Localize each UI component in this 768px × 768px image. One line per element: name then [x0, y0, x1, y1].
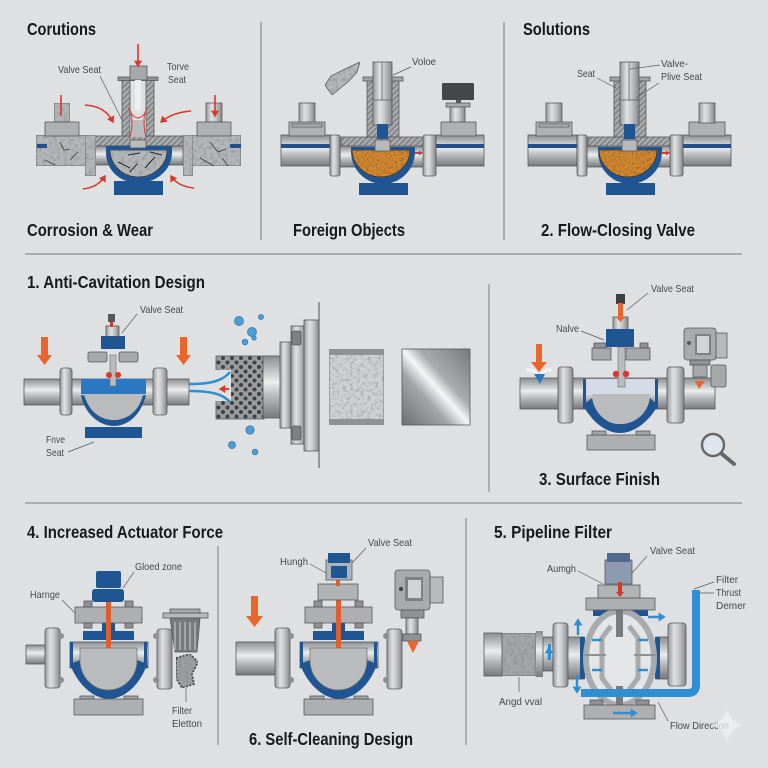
label: Aumgh: Aumgh — [547, 563, 576, 575]
diagram: actuator valve — [26, 571, 172, 715]
label: Valve Plive Seat: Plive Seat — [661, 71, 702, 83]
label: Torve Seat: Torve — [167, 61, 189, 73]
label: Nalve — [556, 323, 604, 340]
icon: filter element with debris — [163, 609, 208, 702]
icon: sparkle watermark — [710, 709, 744, 742]
panel: pipeline filter — [484, 522, 746, 742]
label: Valve Plive Seat: Valve- — [661, 58, 688, 70]
label: Filter Thrust Demer: Thrust — [716, 587, 741, 599]
panel: flow closing valve — [523, 19, 731, 240]
arrow: orange force — [246, 596, 263, 627]
heading: Foreign Objects: Foreign Objects — [293, 220, 405, 240]
label: Valve Seat: Valve Seat — [140, 304, 183, 316]
label: Nalve: Nalve — [556, 323, 579, 335]
panel: corrosion and wear — [27, 19, 241, 240]
diagram: perforated anti-cavitation cage — [214, 302, 319, 468]
label: Angd vval: Angd vval — [499, 696, 542, 708]
icon: magnifying glass — [702, 434, 734, 464]
label: Torve Seat — [167, 61, 189, 86]
swatch: polished surface — [402, 349, 470, 425]
heading: Surface Finish: 3. Surface Finish — [539, 469, 660, 489]
label: Valve Seat — [122, 304, 183, 333]
heading: Increased Actuator Force: 4. Increased Actuator Force — [27, 522, 223, 542]
heading: Corrosion and Wear: Corrosion & Wear — [27, 220, 153, 240]
heading: Anti-Cavitation Design: 1. Anti-Cavitation Design — [27, 272, 205, 292]
label: Filter Eletton — [172, 705, 202, 730]
label: Gloed zone: Gloed zone — [135, 561, 182, 573]
icon: right hand knob actuator — [441, 83, 476, 136]
label: Seat — [577, 68, 616, 88]
panel: foreign objects — [281, 56, 484, 240]
label: Valve Seat — [58, 64, 122, 120]
label: Angd vval — [499, 677, 542, 708]
icon: sensor actuator — [395, 570, 443, 653]
label: Voloe: Voloe — [412, 56, 436, 68]
panel: self-cleaning design — [236, 537, 443, 749]
label: Valve Seat — [627, 283, 694, 310]
label: Filter Thrust Demer — [694, 574, 746, 612]
heading: Corutions: Corutions — [27, 19, 96, 39]
label: Harnge — [30, 589, 75, 613]
label: Filter Thrust Demer: Filter — [716, 574, 738, 586]
label: Filter Thrust Demer: Demer — [716, 600, 746, 612]
diagram: corroded valve — [36, 66, 241, 195]
label: Valve Seat: Valve Seat — [58, 64, 101, 76]
bubbles — [228, 314, 264, 455]
label: Aumgh — [547, 563, 603, 584]
arrows: orange downward force — [37, 337, 191, 365]
diagram: flow closing valve — [528, 62, 731, 195]
arrow: orange force with blue drop — [526, 344, 552, 384]
icon: rock fragment — [325, 62, 360, 95]
label: Seat: Seat — [577, 68, 595, 80]
arrows: corrosion attack — [61, 44, 215, 189]
panel: surface finish — [520, 283, 734, 489]
label: Flow Direction: Flow Direction — [670, 720, 729, 732]
heading: Pipeline Filter: 5. Pipeline Filter — [494, 522, 612, 542]
label: Hungh: Hungh — [280, 556, 308, 568]
diagram: pipeline filter valve — [484, 553, 686, 719]
label: Harnge: Harnge — [30, 589, 60, 601]
icon: sensor actuator — [684, 328, 727, 389]
diagram: surface finish valve — [520, 294, 715, 450]
diagram: valve with debris — [281, 62, 484, 195]
label: Fnve Seat — [46, 434, 94, 459]
label: Valve Seat: Valve Seat — [650, 545, 695, 557]
label: Filter Eletton: Eletton — [172, 718, 202, 730]
heading: Flow-Closing Valve: 2. Flow-Closing Valve — [541, 220, 695, 240]
label: Valve Plive Seat — [630, 58, 702, 98]
label: Valve Seat — [352, 537, 412, 563]
flow lines: two blue streams — [189, 372, 230, 402]
label: Valve Seat: Valve Seat — [651, 283, 694, 295]
label: Flow Direction — [658, 702, 729, 732]
label: Fnve Seat: Fnve — [46, 434, 65, 446]
heading: Self-Cleaning Design: 6. Self-Cleaning Design — [249, 729, 413, 749]
heading: Solutions: Solutions — [523, 19, 590, 39]
diagram: self-cleaning valve — [236, 553, 402, 715]
swatch: rough surface — [329, 349, 384, 425]
panel: anti-cavitation design — [24, 272, 470, 468]
diagram: anti-cavitation valve — [24, 314, 189, 438]
label: Hungh — [280, 556, 326, 573]
label: Valve Seat: Valve Seat — [368, 537, 412, 549]
panel: increased actuator force — [26, 522, 223, 730]
label: Fnve Seat: Seat — [46, 447, 64, 459]
arrows: blue flow direction — [549, 617, 664, 713]
label: Gloed zone — [123, 561, 182, 588]
label: Valve Seat — [632, 545, 695, 573]
label: Torve Seat: Seat — [168, 74, 186, 86]
label: Voloe — [393, 56, 436, 75]
label: Filter Eletton: Filter — [172, 705, 192, 717]
pipe: blue thrust line — [581, 590, 696, 693]
